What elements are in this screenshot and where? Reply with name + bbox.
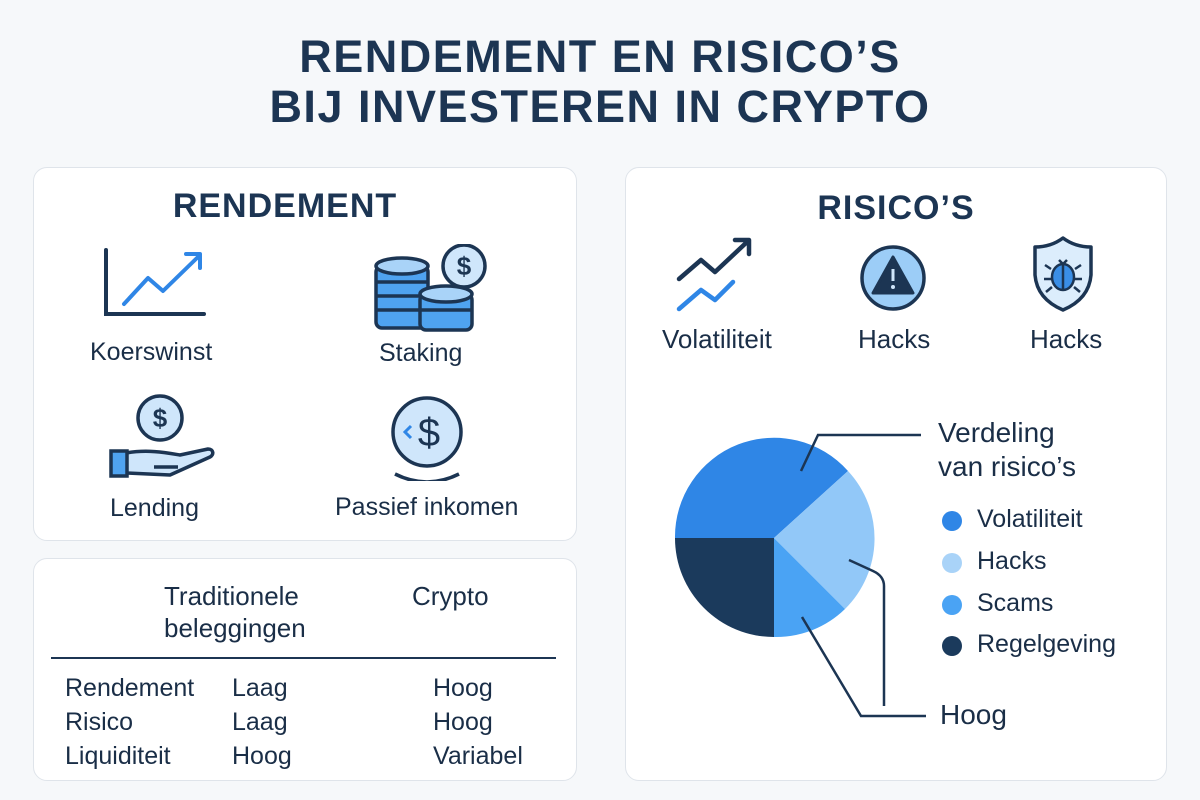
table header: beleggingen <box>164 613 306 643</box>
heading: rendement: RENDEMENT <box>173 187 397 225</box>
icon: passive income coin: $ <box>418 411 440 455</box>
heading: risico's: RISICO’S <box>817 189 975 227</box>
label: passief inkomen: Passief inkomen <box>335 493 518 521</box>
label: volatiliteit: Volatiliteit <box>662 324 772 354</box>
icon: hand with coin <box>109 394 215 478</box>
legend: Volatiliteit <box>977 505 1083 533</box>
panel: comparison table <box>33 558 577 781</box>
icon: coin stacks: $ <box>457 251 472 281</box>
pie chart <box>675 434 926 718</box>
table header <box>164 581 306 643</box>
icon: coin stacks <box>374 244 487 332</box>
panel: rendement <box>33 167 577 541</box>
table header: Traditionele <box>164 581 299 611</box>
icon: volatility <box>676 238 752 312</box>
panel: comparison table: Laag <box>232 708 288 736</box>
table rows: Risico <box>65 708 133 736</box>
panel: comparison table: Hoog <box>433 674 493 702</box>
icon: hand with coin: $ <box>153 403 168 433</box>
pie title: van risico’s <box>938 451 1076 482</box>
panel: risico's <box>625 167 1167 781</box>
icon: warning <box>860 245 926 311</box>
icon: shield bug <box>1033 236 1093 312</box>
panel: comparison table: Hoog <box>433 708 493 736</box>
title: RENDEMENT EN RISICO’S <box>299 31 901 82</box>
label: lending: Lending <box>110 494 199 522</box>
pie title <box>938 417 1076 482</box>
icon: passive income coin <box>391 396 463 481</box>
panel: comparison table: Crypto <box>412 581 489 611</box>
label: hacks 2: Hacks <box>1030 324 1102 354</box>
label: staking: Staking <box>379 339 462 367</box>
legend <box>942 505 1116 658</box>
title: BIJ INVESTEREN IN CRYPTO <box>269 81 931 132</box>
legend: Hacks <box>977 547 1046 575</box>
icon: chart up <box>104 248 206 316</box>
label: hacks: Hacks <box>858 324 930 354</box>
panel: comparison table: Laag <box>232 674 288 702</box>
table rows <box>65 674 194 770</box>
panel: comparison table: Hoog <box>232 742 292 770</box>
pie title: Verdeling <box>938 417 1055 448</box>
legend: Regelgeving <box>977 630 1116 658</box>
table rows: Rendement <box>65 674 194 702</box>
label: hoog: Hoog <box>940 699 1007 730</box>
label: koerswinst: Koerswinst <box>90 338 212 366</box>
table rows: Liquiditeit <box>65 742 171 770</box>
panel: comparison table: Variabel <box>433 742 523 770</box>
title <box>269 31 931 132</box>
legend: Scams <box>977 589 1053 617</box>
